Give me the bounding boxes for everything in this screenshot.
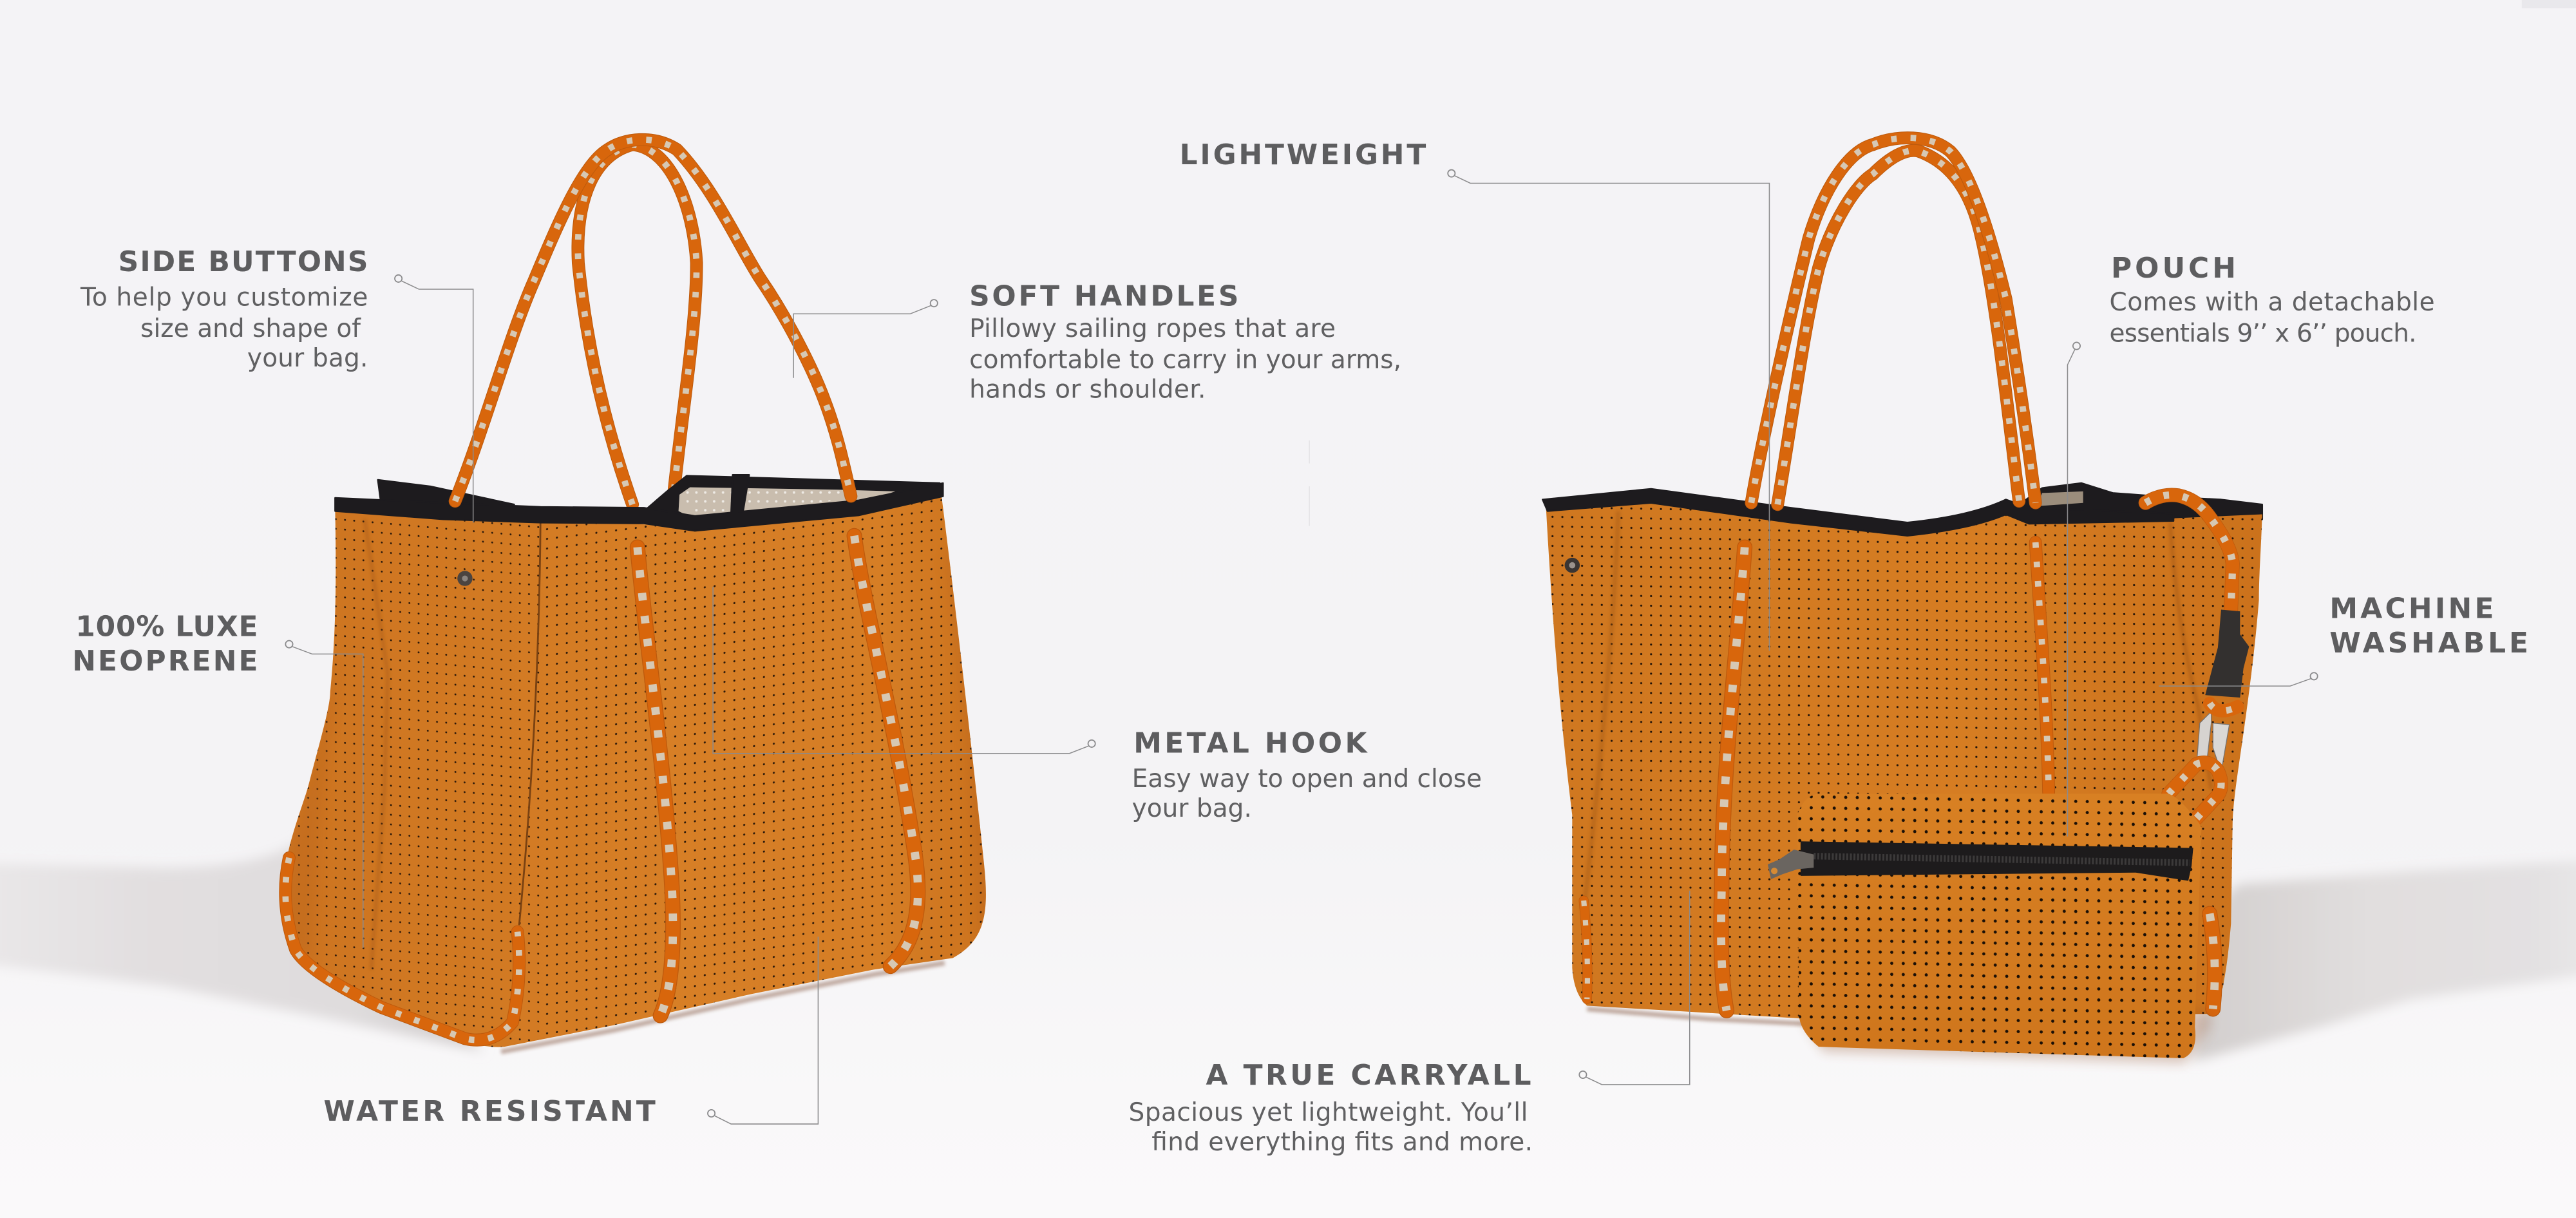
heading: machine washable [2329,592,2528,660]
interior lining [644,475,940,526]
front handle [455,140,851,501]
contact shadow [501,963,945,1052]
text: carryall: find everything fits and more. [1151,1128,1533,1157]
text: side buttons: To help you customize [80,283,368,312]
heading: neoprene: NEOPRENE [72,645,258,678]
text: side buttons: your bag. [247,344,368,373]
text: metal hook: Easy way to open and close [1132,765,1482,794]
floor shadow: right [2193,858,2576,1061]
leader line: carryall [1579,891,1690,1085]
leader line: pouch [2067,342,2080,837]
black rim [335,483,943,531]
text: pouch: Comes with a detachable [2110,288,2435,317]
callout: a true carryall [1129,891,1690,1157]
callout: soft handles [793,280,1401,404]
heading: lightweight: LIGHTWEIGHT [1180,138,1426,171]
faint centre tick [1309,441,1310,526]
heading: carryall: A TRUE CARRYALL [1206,1059,1531,1092]
leader line: metal hook [713,587,1095,754]
leader line: lightweight [1448,170,1769,651]
text: pouch: essentials 9’’ x 6’’ pouch. [2110,319,2417,348]
heading: neoprene: 100% LUXE [75,610,258,643]
heading: neoprene [72,610,258,678]
text: carryall [1129,1098,1533,1157]
callout: water resistant [324,937,818,1128]
callout: metal hook [713,587,1482,823]
text: side buttons: size and shape of [140,314,361,343]
corner seam [519,519,540,925]
back rim left with knot [378,480,514,504]
pouch contact shadow [1804,1011,2210,1063]
leader line: neoprene [285,640,363,948]
zipper [1801,841,2193,880]
product: left tote bag [271,140,1002,1060]
contact shadow [1587,1009,1807,1023]
black rim [1542,489,2174,536]
text: soft handles: comfortable to carry in your arms, [969,345,1401,374]
heading: machine washable: WASHABLE [2329,627,2528,660]
bag body [1546,498,2262,1019]
rear handle [578,145,697,511]
text: carryall: Spacious yet lightweight. You’ll [1129,1098,1528,1127]
text: metal hook: your bag. [1132,794,1252,823]
text: soft handles: hands or shoulder. [969,375,1206,404]
leader line: machine washable [2159,672,2318,686]
back rim and interior [2012,483,2262,522]
side button [457,571,473,586]
text: pouch [2110,288,2435,348]
callout: pouch [2067,252,2435,837]
heading: machine washable: MACHINE [2329,592,2494,625]
pouch [1768,794,2210,1063]
rope loops [1584,542,2215,1011]
callout: machine washable [2159,592,2528,686]
perforations and folds [290,499,986,1047]
floor shadow: left [0,830,485,1052]
text: soft handles: Pillowy sailing ropes that are [969,314,1336,343]
heading: side buttons: SIDE BUTTONS [118,245,368,278]
heading: metal hook: METAL HOOK [1133,727,1368,759]
zipper pull [1768,850,1814,879]
leader line: side buttons [395,275,473,522]
front and side rope loops [285,536,918,1040]
heading: water resistant: WATER RESISTANT [324,1095,656,1128]
text: side buttons [80,283,368,373]
text: soft handles [969,314,1401,404]
pouch body [1797,794,2201,1058]
callout: side buttons [80,245,473,522]
handles [1751,138,2036,504]
bag body [283,495,986,1047]
callout: luxe neoprene [72,610,363,948]
eyelet [1565,558,1580,573]
leader line: water resistant [708,937,818,1124]
leader line: soft handles [793,300,938,378]
text: metal hook [1132,765,1482,823]
callout: lightweight [1180,138,1769,651]
perforations and folds [1536,485,2267,1027]
heading: pouch: POUCH [2111,252,2236,285]
heading: soft handles: SOFT HANDLES [969,280,1238,313]
product: right tote bag [1536,138,2267,1027]
metal hook and rope clip [2146,495,2249,819]
